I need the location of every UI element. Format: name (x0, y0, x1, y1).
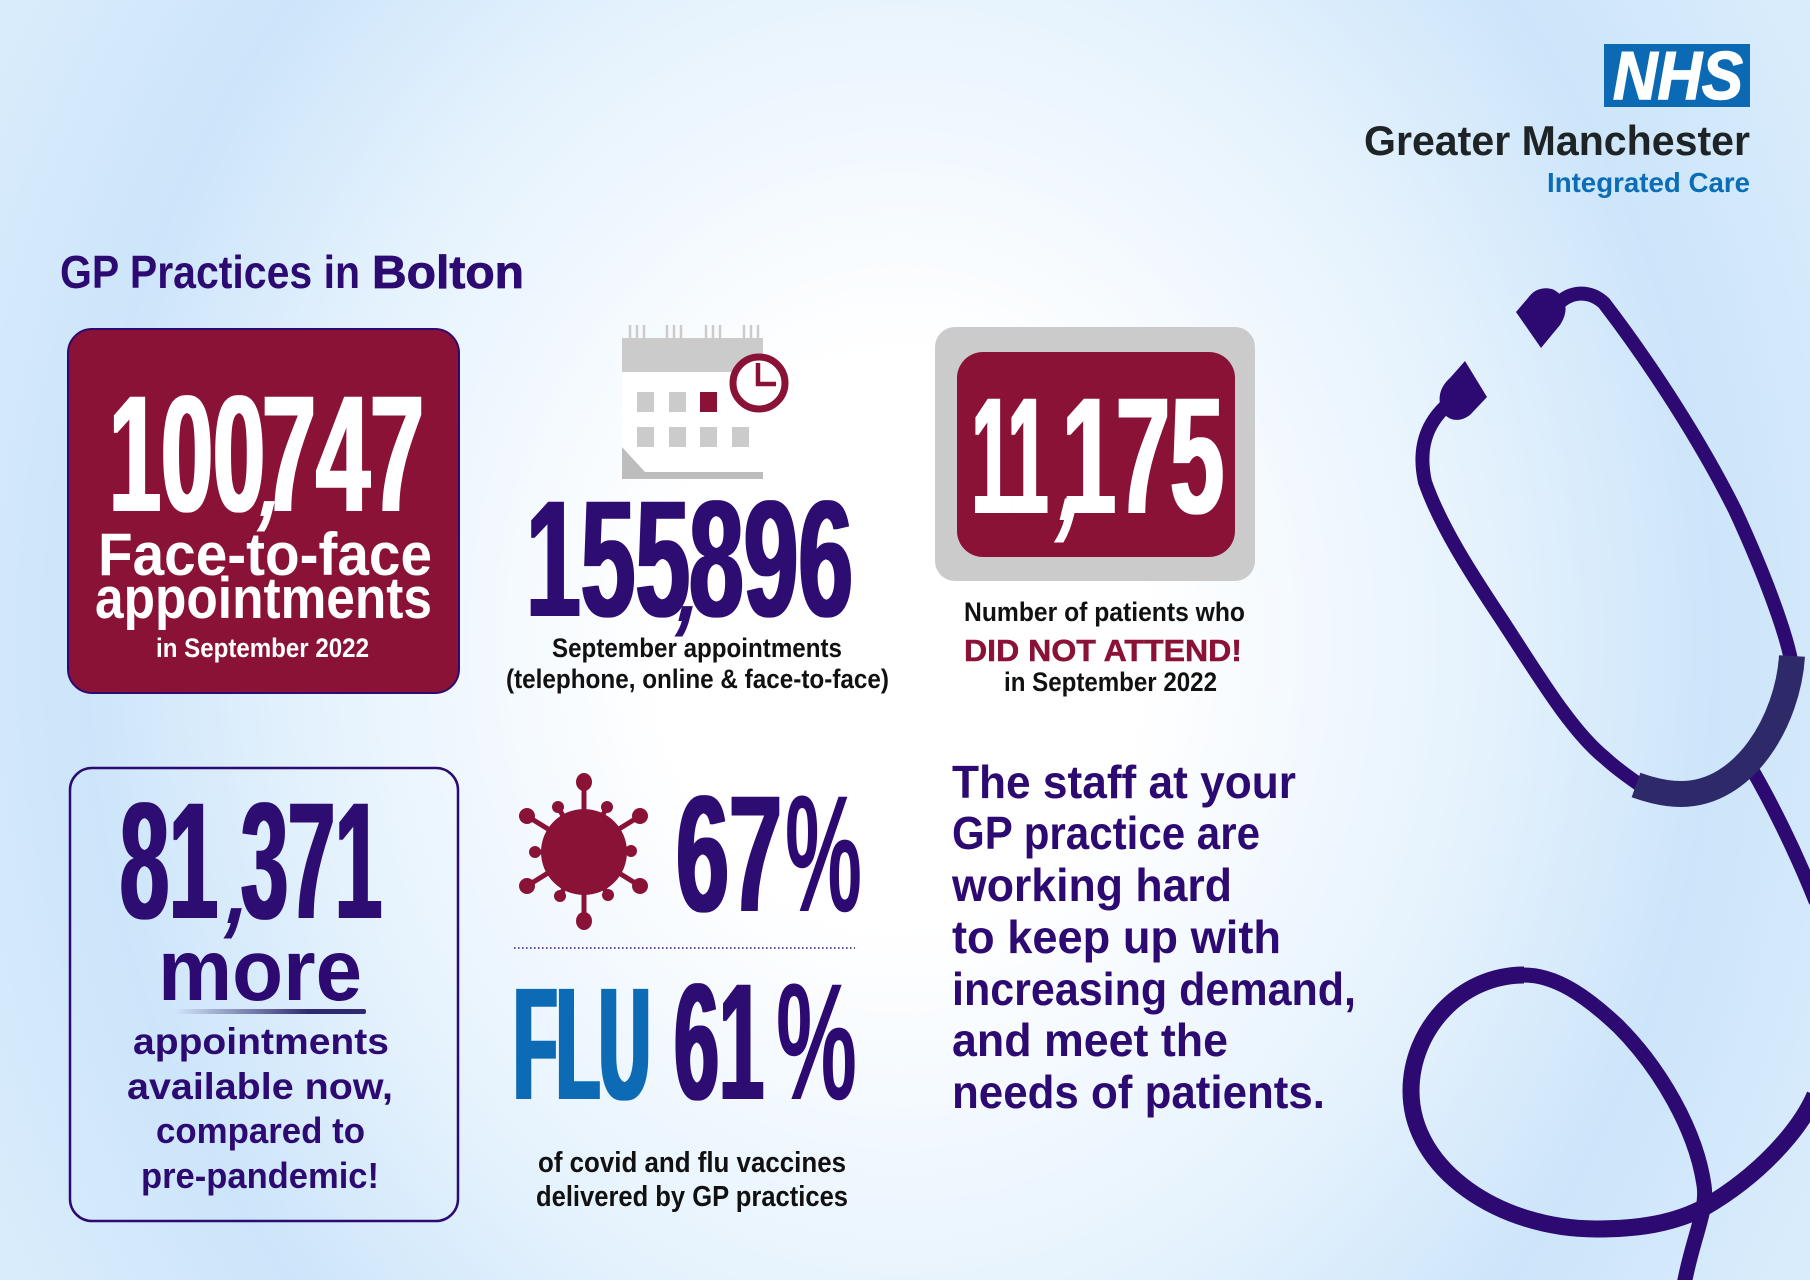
label in September 2022: in September 2022 (156, 633, 369, 663)
number 11,175: 175 (1062, 364, 1224, 549)
label appointments: appointments (95, 566, 432, 631)
number 100,747: , (253, 425, 296, 538)
text block: staff message: needs of patients. (952, 1066, 1325, 1118)
text pre-pandemic: pre-pandemic! (141, 1155, 379, 1196)
label Face-to-face: Face-to-face (98, 521, 432, 588)
number 81,371: 81 (120, 769, 218, 954)
word more: more (158, 922, 362, 1019)
panel: face-to-face appointments (68, 329, 459, 693)
number 11,175: 11 (972, 364, 1048, 549)
icon: calendar with clock (622, 325, 785, 479)
title: GP Practices in (60, 246, 360, 298)
stat: flu 61%: % (776, 950, 857, 1135)
caption: did not attend: DID NOT ATTEND! (964, 633, 1242, 668)
stat: flu 61%: 61 (674, 950, 764, 1135)
caption: telephone, online and face-to-face: (telephone, online & face-to-face) (506, 664, 889, 694)
stat: covid 67%: % (785, 762, 862, 947)
number 81,371: 371 (241, 769, 382, 954)
text block: staff message: to keep up with (952, 911, 1281, 963)
text block: staff message: GP practice are (952, 807, 1260, 859)
stat: 155,896: , (671, 530, 714, 643)
panel: did not attend (935, 327, 1255, 581)
title: Bolton (372, 246, 524, 298)
text block: staff message: working hard (951, 859, 1232, 911)
panel: 81,371 more appointments (70, 768, 458, 1221)
Greater Manchester: Greater Manchester (1364, 117, 1750, 164)
stat: covid 67%: 67 (676, 762, 782, 947)
icon: stethoscope (1411, 288, 1810, 1280)
text block: staff message: The staff at your (952, 756, 1296, 808)
NHS badge: NHS (1613, 38, 1743, 114)
stat: 155,896: 896 (689, 467, 853, 652)
text appointments: appointments (133, 1021, 389, 1062)
infographic canvas: FLU (514, 954, 650, 1133)
underline (175, 1009, 366, 1014)
text block: staff message: increasing demand, (952, 963, 1356, 1015)
number 100,747: 100 (109, 362, 265, 547)
text block: staff message (951, 756, 1356, 1118)
caption: number of patients who: Number of patients who (964, 597, 1245, 627)
caption: in September 2022: in September 2022 (1004, 667, 1217, 697)
number 100,747: 747 (262, 362, 424, 547)
caption: delivered by GP practices: delivered by GP practices (536, 1181, 848, 1213)
number 11,175 (972, 364, 1224, 551)
caption: September appointments: September appointments (552, 633, 842, 663)
caption: of covid and flu vaccines: of covid and flu vaccines (538, 1147, 846, 1179)
logo: NHS Greater Manchester Integrated Care (1364, 38, 1750, 198)
Integrated Care: Integrated Care (1547, 167, 1750, 198)
text block: staff message: and meet the (952, 1014, 1228, 1066)
icon: virus (519, 773, 648, 930)
text compared to: compared to (156, 1110, 365, 1151)
stat: 155,896: 155 (526, 467, 690, 652)
text available now: available now, (127, 1066, 393, 1107)
number 81,371: , (220, 832, 263, 945)
number 11,175: , (1048, 389, 1109, 551)
